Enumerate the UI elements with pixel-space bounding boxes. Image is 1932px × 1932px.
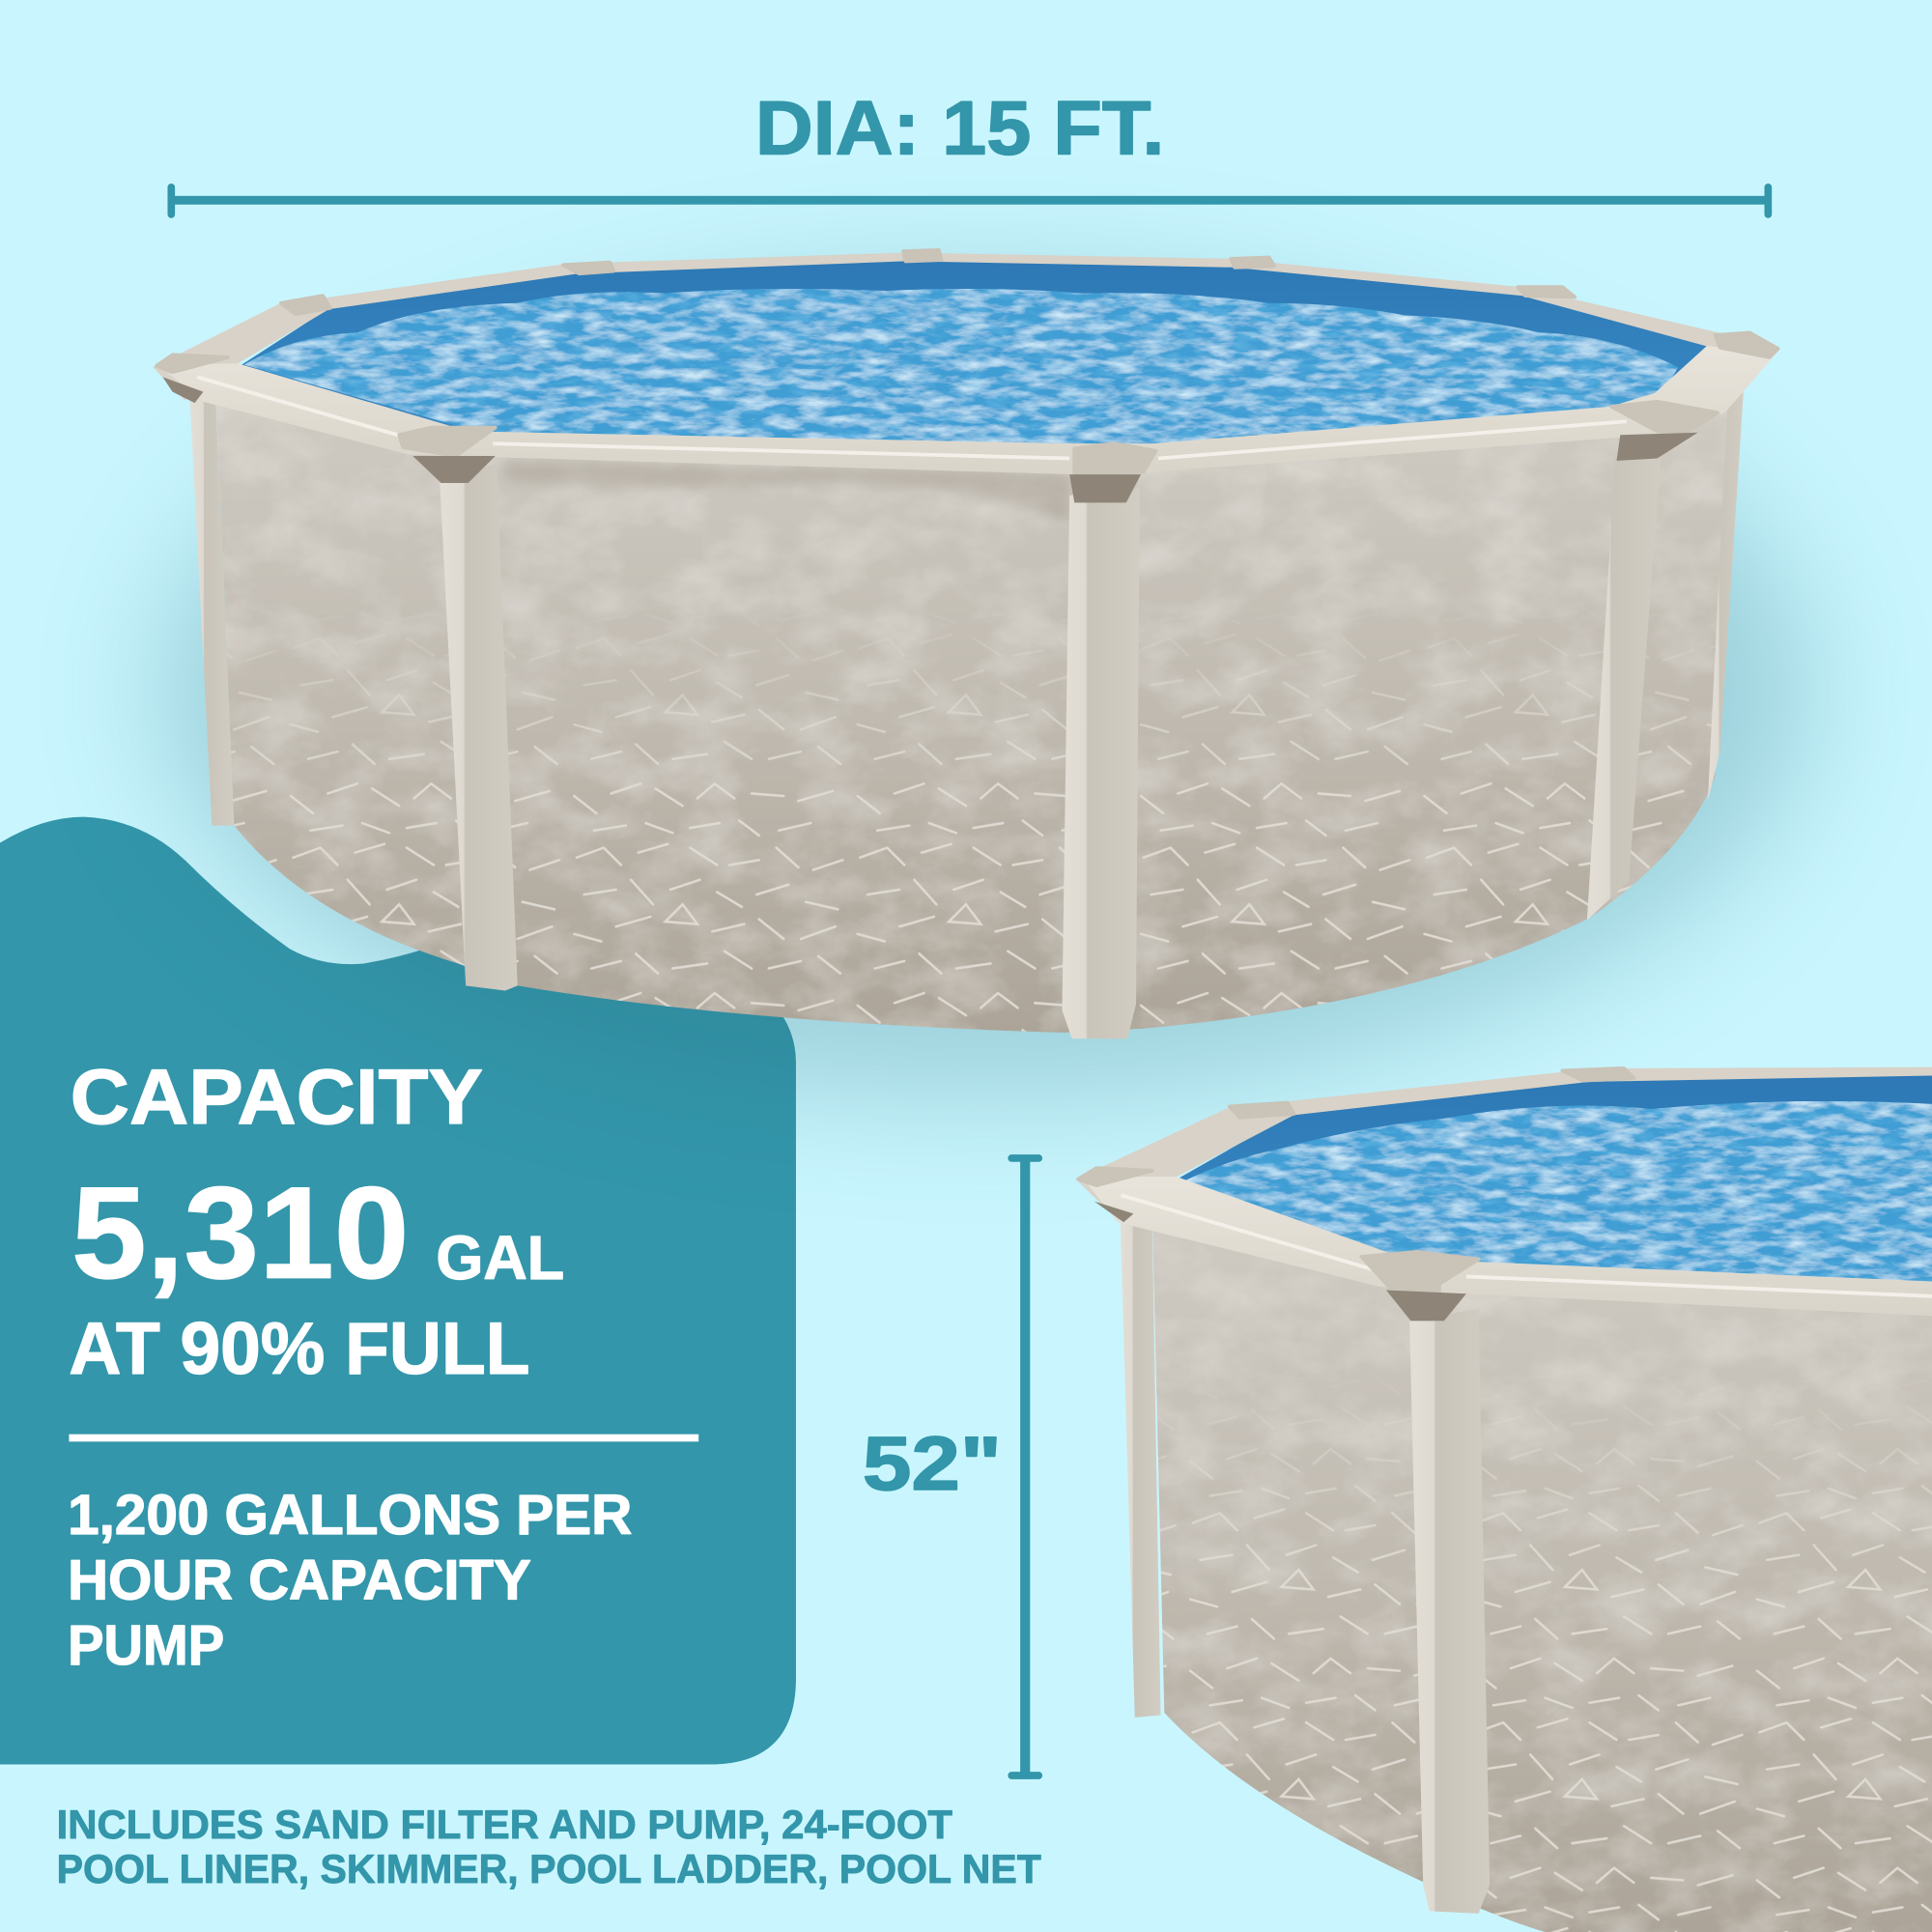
pool illustration: close-up [1076,1067,1932,1932]
wall texture [231,644,1712,1032]
rim shadow on wall [505,462,1069,524]
text: included items: INCLUDES SAND FILTER AND PUMP, 24-FOOT [57,1802,952,1847]
text: pump capacity [68,1484,632,1677]
arrow: height dimension line [1008,1154,1042,1779]
divider [69,1435,698,1441]
pool posts [189,392,1744,1038]
water [244,289,1678,446]
pool illustration: full view [153,250,1786,1060]
pool soft shadow [160,283,1811,1096]
panel text: capacity [68,1054,698,1677]
panel: capacity background [0,817,796,1765]
arrow: diameter dimension line [167,184,1772,218]
stat: 5,310 gallons: 5,310 [71,1160,409,1306]
heading: capacity: CAPACITY [71,1054,483,1141]
text: included items [57,1802,1041,1891]
pool rim [1076,1067,1932,1316]
bracket shadows [1094,1202,1466,1321]
height label: 52" [863,1420,1002,1506]
liner [1171,1072,1932,1284]
bracket shadows [162,377,1698,502]
text: at 90% full: AT 90% FULL [69,1308,529,1390]
rim brackets [156,250,1778,473]
water [1185,1101,1932,1284]
pool wall [1152,1208,1932,1932]
pool rim [153,252,1779,474]
stat: 5,310 gallons [71,1160,564,1306]
liner [234,259,1713,448]
text: pump capacity: 1,200 GALLONS PER [68,1484,632,1547]
stat: 5,310 gallons: GAL [437,1223,564,1293]
pool wall [215,392,1741,1033]
rim brackets [1078,1068,1634,1293]
wall texture [1109,1182,1932,1932]
text: pump capacity: PUMP [68,1614,224,1677]
text: included items: POOL LINER, SKIMMER, POOL LADDER, POOL NET [57,1846,1041,1891]
text: pump capacity: HOUR CAPACITY [68,1549,531,1612]
title: diameter: DIA: 15 FT. [755,84,1164,170]
pool posts [1120,1213,1490,1914]
